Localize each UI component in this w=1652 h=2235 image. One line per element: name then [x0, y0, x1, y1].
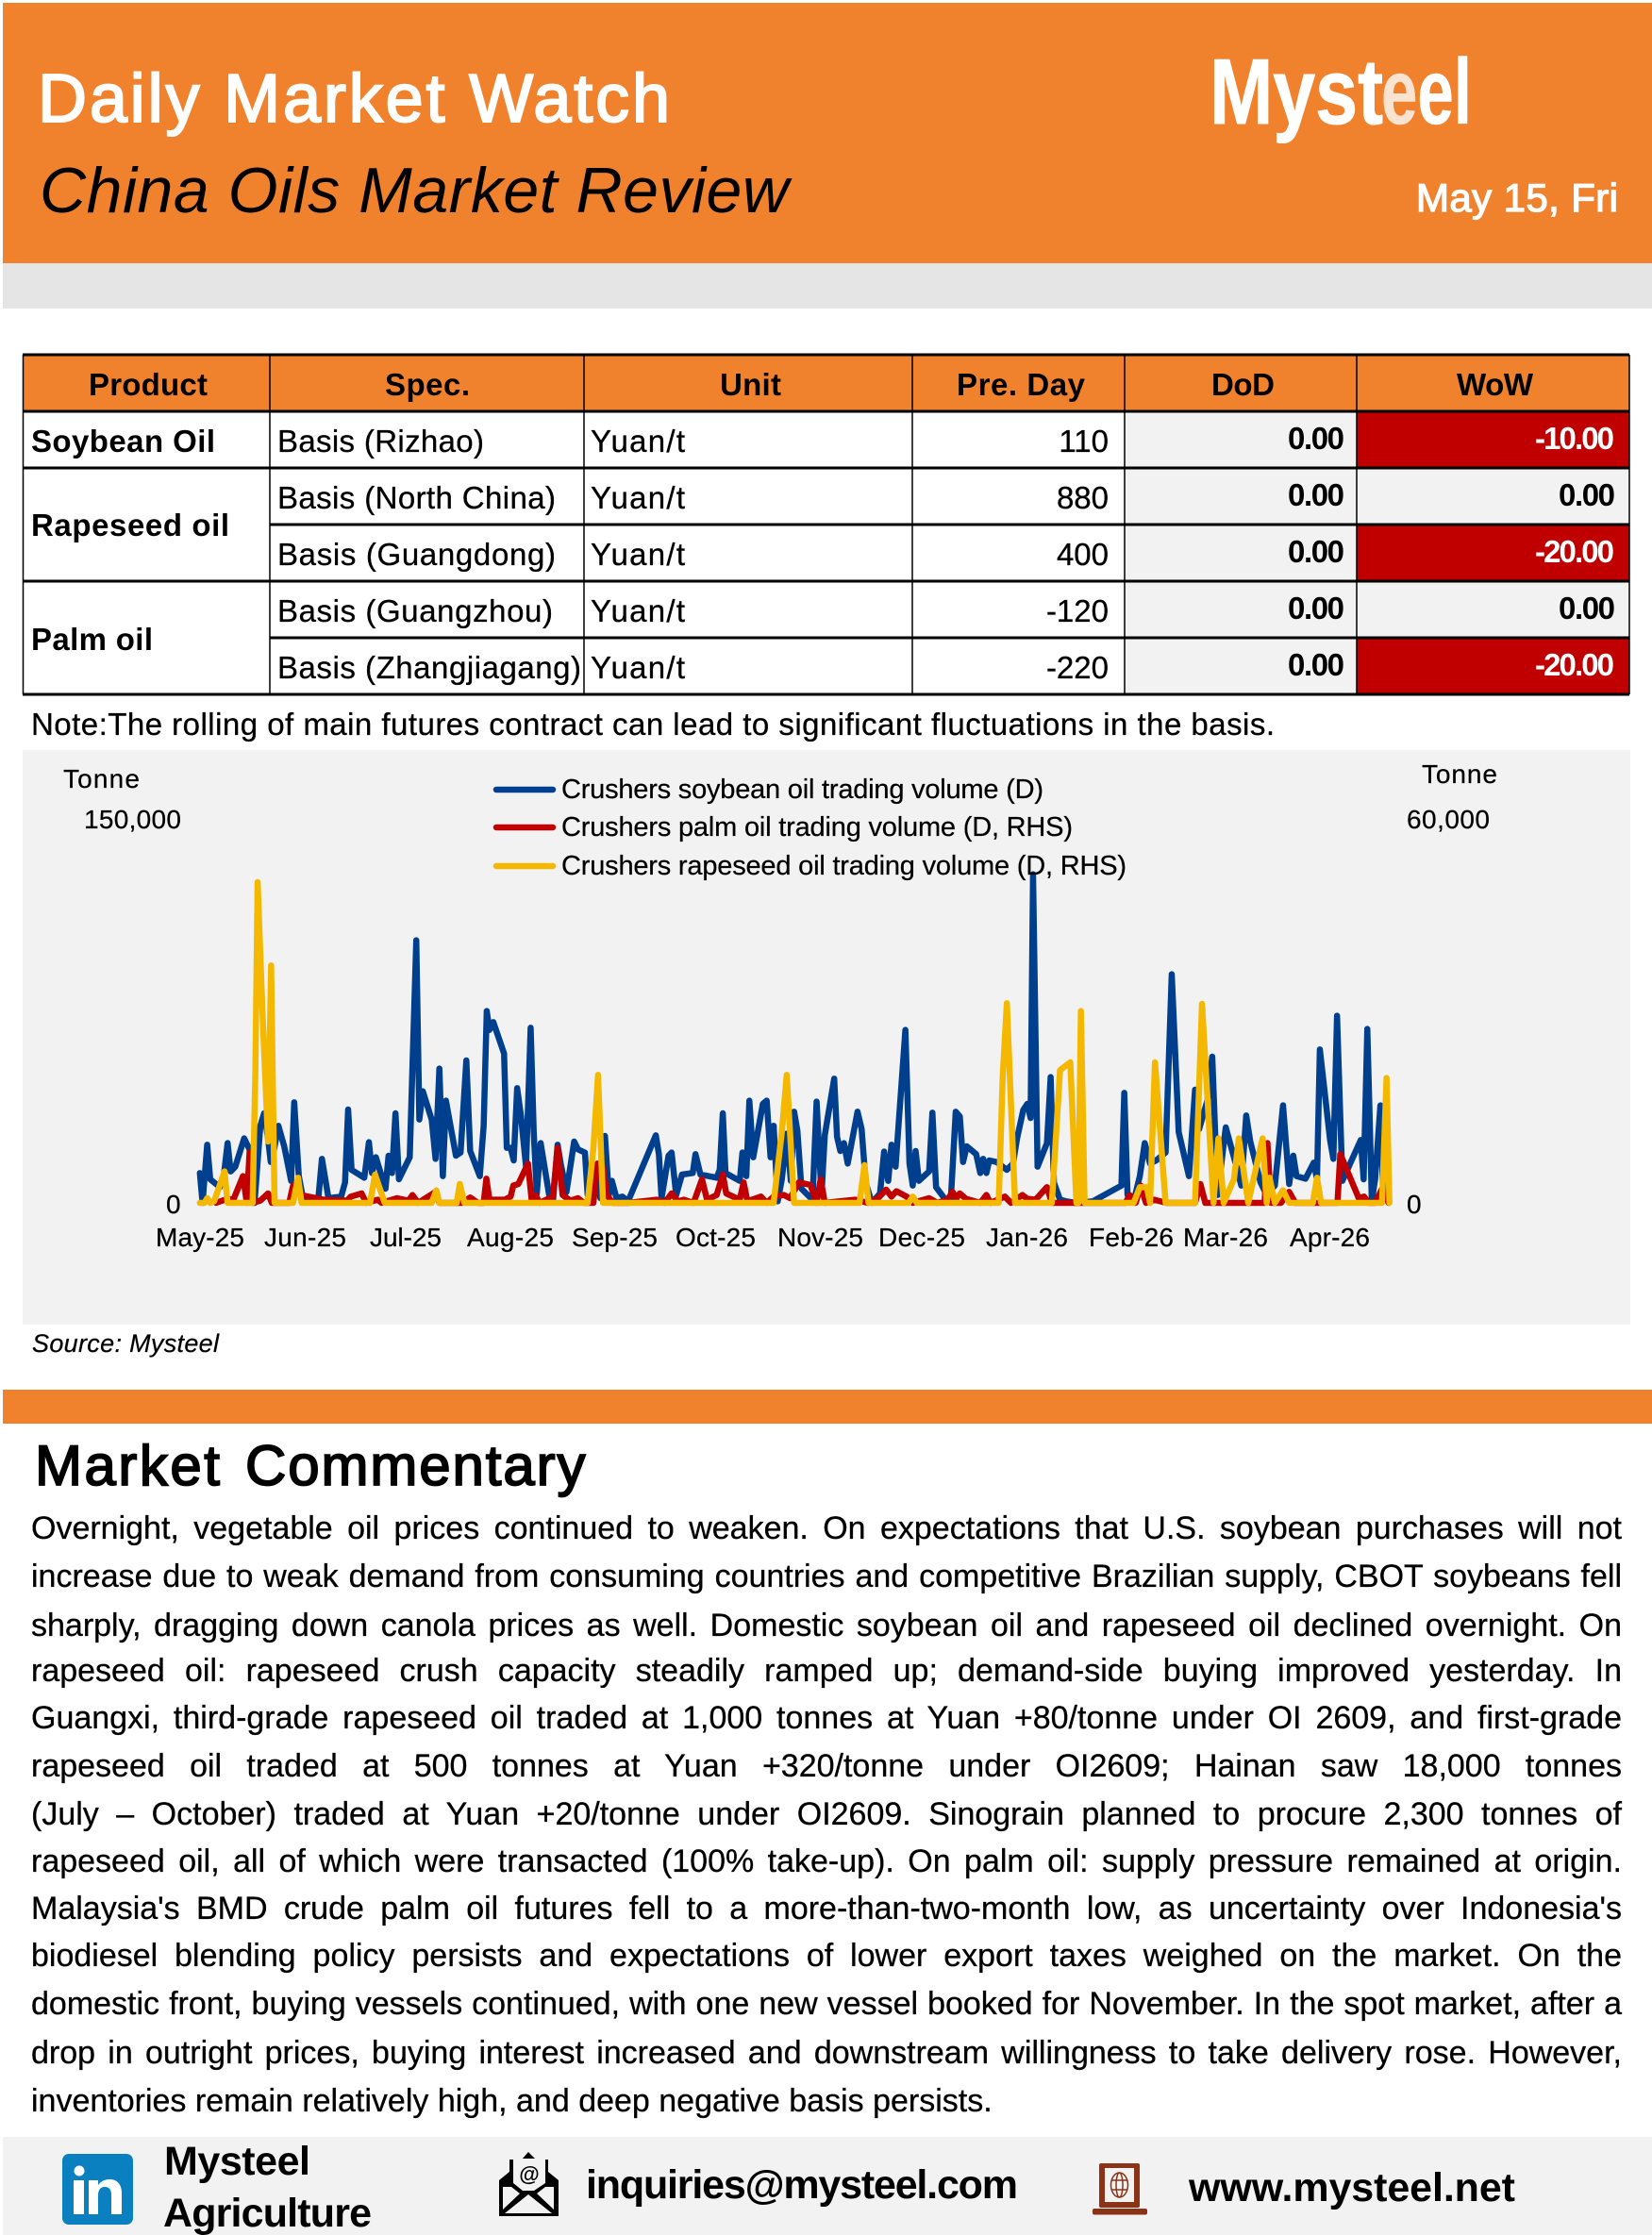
x axis labels: Feb-26: [1089, 1223, 1174, 1252]
row: Rapeseed oil, North China: [31, 477, 1615, 542]
table header row: DoD: [1211, 367, 1275, 402]
icon: LinkedIn: [62, 2154, 133, 2225]
text: Mysteel Agriculture: Agriculture: [163, 2191, 372, 2235]
commentary paragraph: increase due to weak demand from consuming countries and competitive Brazilian supply, CBOT soybeans fell: [31, 1559, 1622, 1594]
chart source: Source: Mysteel: [32, 1329, 220, 1358]
icon: email envelope: [499, 2152, 559, 2216]
row: Rapeseed oil, Guangdong: Basis (Guangdong): [277, 537, 556, 572]
right axis labels: Tonne: [1422, 759, 1497, 789]
commentary paragraph: Malaysia's BMD crude palm oil futures fell to a more-than-two-month low, as uncertainty over Indonesia's: [31, 1891, 1622, 1926]
table note: Note:The rolling of main futures contract can lead to significant fluctuations in the basis.: [31, 707, 1275, 742]
commentary paragraph: drop in outright prices, buying interest increased and downstream willingness to take delivery rose. However,: [31, 2035, 1622, 2071]
table header row: WoW: [1457, 367, 1534, 402]
heading: market commentary: Market: [35, 1434, 222, 1497]
x axis labels: Jun-25: [264, 1223, 346, 1252]
row: Rapeseed oil, North China: 880: [1057, 480, 1109, 515]
panel: trading volume chart: [23, 750, 1630, 1325]
table header row: Product: [89, 367, 208, 402]
table header row: Pre. Day: [957, 367, 1086, 402]
row: Rapeseed oil, North China: Yuan/t: [591, 480, 685, 515]
row: Palm oil, Guangzhou: 0.00: [1288, 591, 1344, 625]
row: Palm oil, Guangzhou: Yuan/t: [591, 593, 685, 628]
left axis labels: Tonne: [63, 764, 140, 793]
x axis labels: [156, 1223, 1370, 1252]
commentary paragraph: inventories remain relatively high, and deep negative basis persists.: [31, 2083, 993, 2119]
x axis labels: Aug-25: [467, 1223, 554, 1252]
row: Soybean Oil, Rizhao: [31, 421, 1614, 459]
x axis labels: Jan-26: [986, 1223, 1068, 1252]
row: Palm oil, Guangzhou: Palm oil: [31, 622, 153, 657]
row: Palm oil, Guangzhou: -120: [1046, 593, 1109, 628]
row: Palm oil, Zhangjiagang: 0.00: [1288, 647, 1344, 682]
commentary paragraph: (July – October) traded at Yuan +20/tonne under OI2609. Sinograin planned to procure 2,300 tonnes of: [31, 1796, 1622, 1832]
x axis labels: Mar-26: [1183, 1223, 1268, 1252]
row: Rapeseed oil, North China: Rapeseed oil: [31, 508, 229, 542]
row: Palm oil, Zhangjiagang: -220: [1046, 650, 1109, 685]
row: Rapeseed oil, Guangdong: 0.00: [1288, 534, 1344, 569]
commentary paragraph: rapeseed oil: rapeseed crush capacity steadily ramped up; demand-side buying improved yesterday. In: [31, 1653, 1622, 1689]
text: Mysteel Agriculture: [163, 2139, 372, 2235]
right axis labels: 60,000: [1407, 805, 1490, 834]
row: Rapeseed oil, North China: Basis (North China): [277, 480, 556, 515]
right axis labels: 0: [1407, 1190, 1422, 1219]
left axis labels: 150,000: [84, 805, 181, 834]
table header row: Spec.: [385, 367, 470, 402]
x axis labels: Nov-25: [777, 1223, 863, 1252]
row: Soybean Oil, Rizhao: Soybean Oil: [31, 424, 215, 459]
commentary paragraph: Overnight, vegetable oil prices continued to weaken. On expectations that U.S. soybean purchases will not: [31, 1510, 1622, 1546]
commentary paragraph: [31, 1510, 1623, 2119]
row: Palm oil, Guangzhou: [31, 591, 1615, 657]
row: Palm oil, Guangzhou: 0.00: [1559, 591, 1615, 625]
x axis labels: Oct-25: [676, 1223, 756, 1252]
chart legend: Crushers rapeseed oil trading volume (D, RHS): [561, 851, 1126, 881]
commentary paragraph: biodiesel blending policy persists and expectations of lower export taxes weighed on the market. On the: [31, 1938, 1622, 1974]
text: website: www.mysteel.net: [1188, 2165, 1515, 2210]
row: Palm oil, Zhangjiagang: -20.00: [1535, 647, 1614, 682]
row: Palm oil, Zhangjiagang: [277, 647, 1614, 685]
row: Rapeseed oil, Guangdong: Yuan/t: [591, 537, 685, 572]
x axis labels: Apr-26: [1290, 1223, 1370, 1252]
subtitle: China Oils Market Review: [40, 155, 793, 226]
section divider band: [3, 1390, 1652, 1424]
row: Soybean Oil, Rizhao: -10.00: [1535, 421, 1614, 456]
icon: email envelope: @: [519, 2162, 540, 2186]
line series: soybean oil volume: [200, 875, 1389, 1203]
row: Rapeseed oil, Guangdong: -20.00: [1535, 534, 1614, 569]
commentary paragraph: Guangxi, third-grade rapeseed oil traded at 1,000 tonnes at Yuan +80/tonne under OI 2609, and first-grade: [31, 1700, 1622, 1736]
chart legend: Crushers soybean oil trading volume (D): [561, 775, 1043, 805]
heading: market commentary: Commentary: [245, 1434, 587, 1497]
commentary paragraph: sharply, dragging down canola prices as well. Domestic soybean oil and rapeseed oil declined overnight. On: [31, 1608, 1622, 1643]
left axis labels: [63, 764, 181, 1219]
left axis labels: 0: [166, 1190, 181, 1219]
row: Palm oil, Zhangjiagang: Yuan/t: [591, 650, 685, 685]
line series: rapeseed oil volume: [200, 882, 1390, 1203]
table header row: Unit: [720, 367, 781, 402]
table header row: [89, 367, 1534, 402]
row: Soybean Oil, Rizhao: Basis (Rizhao): [277, 424, 484, 459]
text: Mysteel Agriculture: Mysteel: [164, 2139, 310, 2184]
row: Rapeseed oil, Guangdong: [277, 534, 1614, 572]
row: Soybean Oil, Rizhao: 110: [1059, 424, 1109, 459]
right axis labels: [1407, 759, 1497, 1219]
line series: palm oil volume: [216, 1143, 1389, 1203]
date: May 15, Fri: [1416, 175, 1618, 220]
commentary paragraph: domestic front, buying vessels continued, with one new vessel booked for November. In the spot market, after a: [31, 1986, 1622, 2022]
text: email address: inquiries@mysteel.com: [586, 2162, 1018, 2208]
row: Palm oil, Zhangjiagang: Basis (Zhangjiagang): [277, 650, 581, 685]
logo: Mysteel: Myst: [1210, 40, 1383, 143]
row: Rapeseed oil, North China: 0.00: [1559, 477, 1615, 512]
x axis labels: Sep-25: [572, 1223, 658, 1252]
table: basis prices: [23, 355, 1629, 694]
header banner: [3, 3, 1652, 309]
x axis labels: Jul-25: [370, 1223, 442, 1252]
icon: laptop with globe: [1093, 2163, 1147, 2215]
title: Daily Market Watch: [38, 61, 670, 137]
chart legend: Crushers palm oil trading volume (D, RHS): [561, 812, 1073, 842]
commentary paragraph: rapeseed oil, all of which were transacted (100% take-up). On palm oil: supply pressure remained at origin.: [31, 1843, 1622, 1879]
row: Soybean Oil, Rizhao: Yuan/t: [591, 424, 685, 459]
logo: Mysteel: eel: [1381, 40, 1472, 143]
chart legend: [496, 775, 1126, 881]
row: Palm oil, Guangzhou: Basis (Guangzhou): [277, 593, 553, 628]
commentary paragraph: rapeseed oil traded at 500 tonnes at Yuan +320/tonne under OI2609; Hainan saw 18,000 tonnes: [31, 1748, 1622, 1784]
x axis labels: Dec-25: [878, 1223, 965, 1252]
row: Rapeseed oil, Guangdong: 400: [1057, 537, 1109, 572]
footer bar: [3, 2137, 1652, 2235]
row: Soybean Oil, Rizhao: 0.00: [1288, 421, 1344, 456]
row: Rapeseed oil, North China: 0.00: [1288, 477, 1344, 512]
x axis labels: May-25: [156, 1223, 244, 1252]
